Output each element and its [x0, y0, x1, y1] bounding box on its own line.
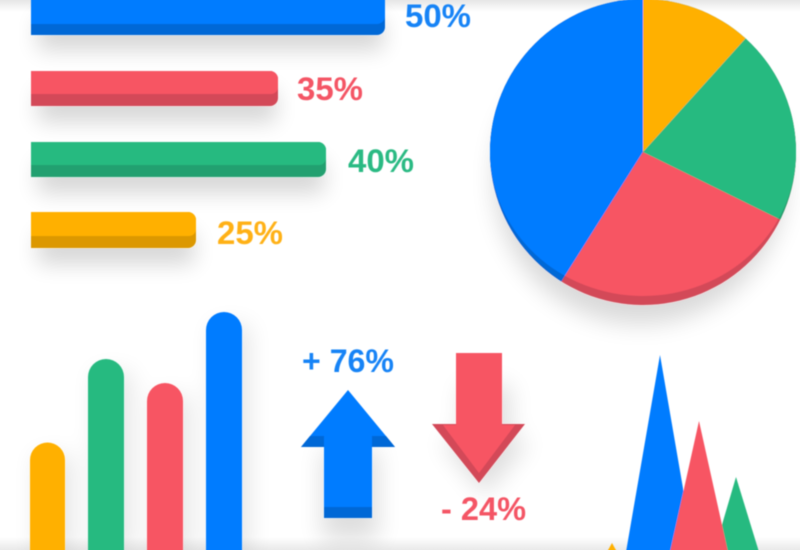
- arrow shadow: [440, 385, 530, 495]
- down arrow with -24%: [432, 353, 530, 527]
- up arrow with +76%: [301, 343, 395, 540]
- triangle: red: [670, 421, 728, 550]
- arrow shadow: [322, 450, 378, 540]
- bar: green 40%: [31, 142, 326, 193]
- pie slices: [490, 0, 796, 296]
- label: 35%: 35%: [297, 71, 363, 107]
- label: 40%: 40%: [348, 143, 414, 179]
- column chart: [30, 312, 249, 550]
- pie depth rim: [489, 0, 796, 306]
- triangle: green: [714, 477, 759, 550]
- column: blue: [206, 312, 242, 550]
- bar: blue 50%: [31, 0, 385, 50]
- icon: up arrow: [301, 390, 395, 518]
- pie chart: [486, 0, 797, 332]
- triangle: yellow: [607, 543, 617, 550]
- column: yellow: [30, 442, 65, 550]
- label: 25%: 25%: [217, 215, 283, 251]
- column: red: [147, 383, 183, 550]
- bar: yellow 25%: [31, 212, 196, 264]
- icon: down arrow: [432, 353, 525, 483]
- label: +76%: + 76%: [302, 343, 394, 379]
- triangle: blue: [626, 355, 694, 550]
- horizontal bar chart: [31, 0, 471, 264]
- label: -24%: - 24%: [441, 491, 526, 527]
- pie shadow: [494, 32, 786, 324]
- bar: red 35%: [31, 71, 278, 122]
- triangle chart: [607, 355, 759, 550]
- column shadows: [36, 325, 249, 550]
- column: green: [88, 359, 124, 550]
